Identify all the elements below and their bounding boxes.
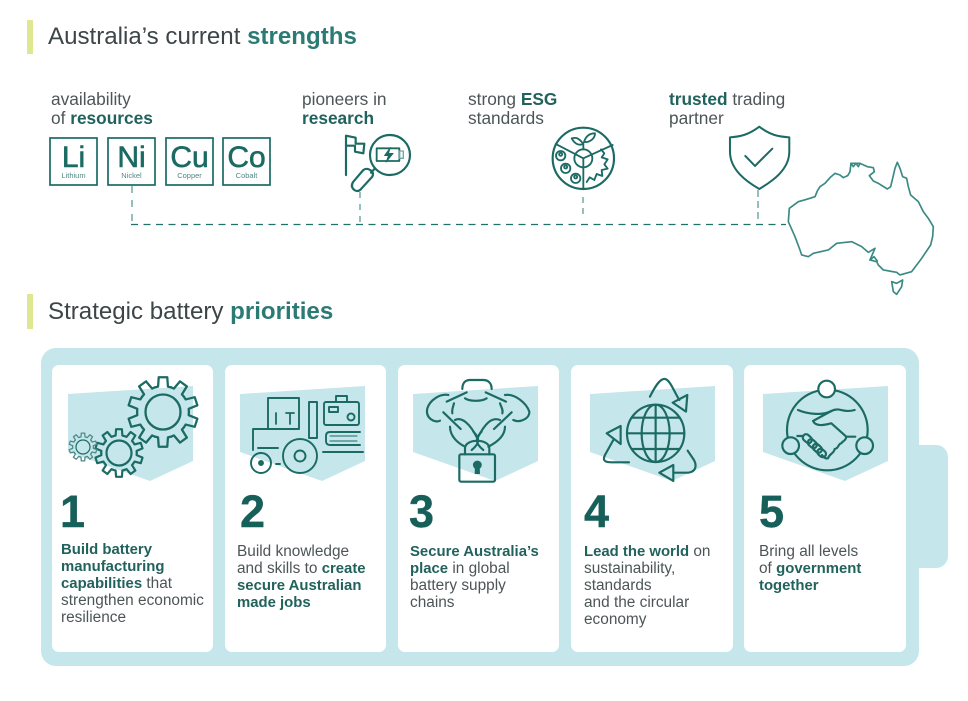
text: card 3: battery supply: [410, 577, 506, 594]
tile: Cobalt: Co: [227, 141, 266, 174]
text: card 1: strengthen economic: [61, 592, 204, 609]
text: card 3: place in global: [410, 560, 510, 577]
icon: globe with recycling arrows: [604, 379, 696, 481]
text: card 4: sustainability,: [584, 560, 675, 577]
tile: Cobalt: Cobalt: [236, 171, 258, 180]
text: card 5: Bring all levels: [759, 543, 858, 560]
card 5: government together: [744, 365, 906, 652]
text: trusted trading partner: partner: [669, 108, 724, 128]
text: card 1: resilience: [61, 609, 126, 626]
element tiles: [50, 138, 270, 185]
tile: Nickel: Nickel: [121, 171, 142, 180]
icon: flexed arms and padlock: [427, 380, 529, 482]
icon: three gears: [69, 377, 199, 477]
tile: Copper: Cu: [170, 141, 209, 174]
number 1: 1: [60, 486, 85, 537]
text: pioneers in research: pioneers in: [302, 89, 387, 109]
text: availability of resources: of resources: [51, 108, 153, 128]
icon: handshake in a circle: [782, 381, 873, 470]
text: trusted trading partner: trusted trading: [669, 89, 785, 109]
text: card 4: economy: [584, 611, 647, 628]
text: card 2: made jobs: [237, 595, 311, 611]
icon: shield with check mark: [730, 127, 789, 189]
heading: Australia's current strengths: Australia’s current strengths: [48, 23, 357, 50]
text: card 1: Build battery: [61, 542, 153, 558]
map: Australia outline: [788, 162, 933, 294]
tile: Lithium: Lithium: [61, 171, 86, 180]
card 2: knowledge and skills: [225, 365, 386, 652]
card 3: supply chains: [398, 365, 559, 652]
panel: battery body: [41, 348, 948, 666]
tile: Copper: Copper: [177, 171, 202, 180]
text: card 2: secure Australian: [237, 578, 361, 594]
number 5: 5: [759, 486, 784, 537]
text: card 1: capabilities that: [61, 575, 172, 592]
text: card 5: of government: [759, 560, 861, 577]
card 4: lead the world: [571, 365, 733, 652]
text: card 3: Secure Australia’s: [410, 544, 539, 560]
tile: Lithium: [50, 138, 97, 185]
number 2: 2: [240, 486, 265, 537]
tile: Cobalt: [223, 138, 270, 185]
number 3: 3: [409, 486, 434, 537]
text: availability of resources: availability: [51, 89, 131, 109]
icon: ESG circle with plant, people and gear: [553, 128, 614, 189]
number 4: 4: [584, 486, 609, 537]
text: card 2: Build knowledge: [237, 543, 349, 560]
tile: Nickel: [108, 138, 155, 185]
text: card 3: chains: [410, 594, 455, 611]
icon: forklift with luggage and books: [251, 396, 363, 473]
tile: Lithium: Li: [62, 141, 85, 174]
tile: Copper: [166, 138, 213, 185]
card 1: manufacturing capabilities: [52, 365, 213, 652]
tile: Nickel: Ni: [117, 141, 146, 174]
heading: Strategic battery priorities: Strategic battery priorities: [48, 298, 333, 325]
dashed connector lines: [131, 186, 786, 224]
text: card 4: Lead the world on: [584, 543, 710, 560]
text: card 5: together: [759, 578, 819, 594]
text: card 2: and skills to create: [237, 560, 366, 577]
icon: flag and magnifying glass with battery: [346, 135, 410, 191]
text: card 4: and the circular: [584, 594, 689, 611]
text: strong ESG standards: strong ESG: [468, 89, 557, 109]
text: card 4: standards: [584, 577, 652, 594]
text: card 1: manufacturing: [61, 559, 164, 575]
text: strong ESG standards: standards: [468, 108, 544, 128]
text: pioneers in research: research: [302, 108, 374, 128]
